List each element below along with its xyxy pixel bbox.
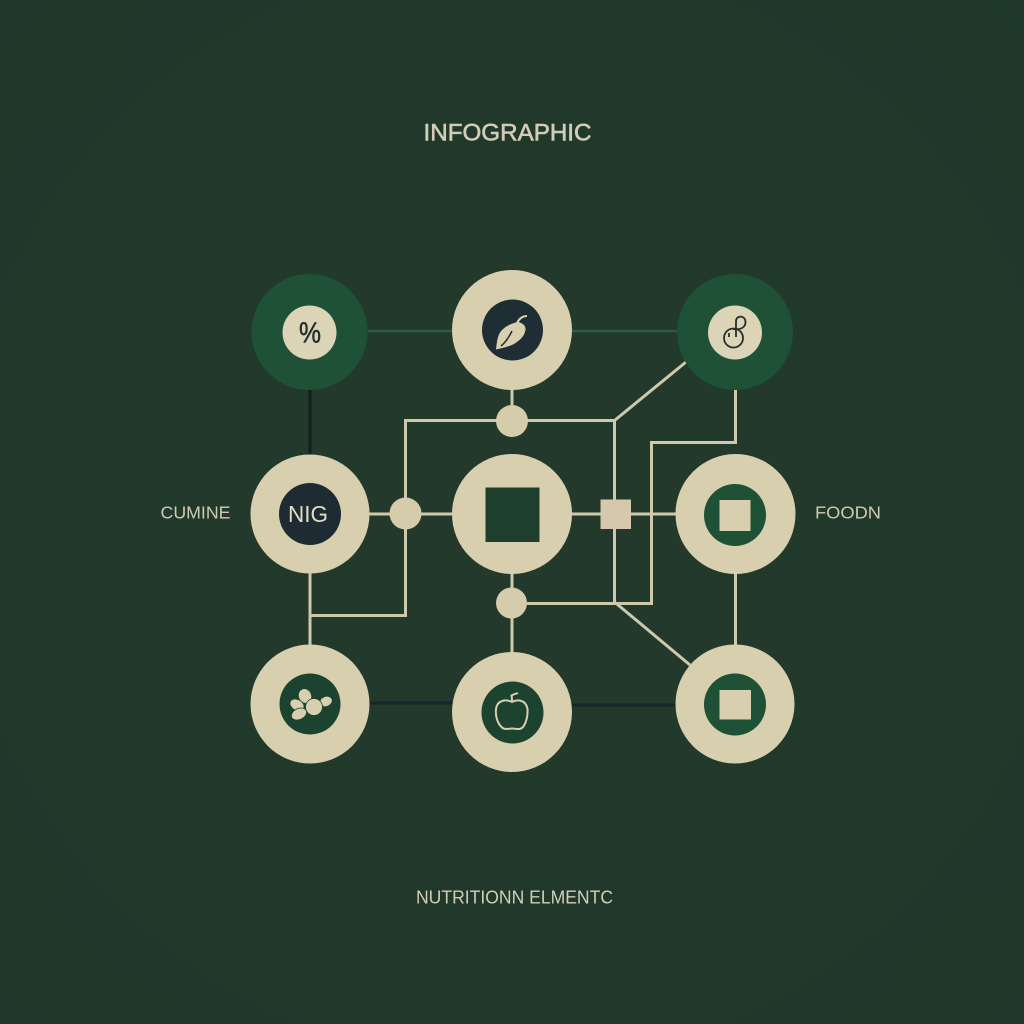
icon: apple: [496, 693, 528, 729]
node: top right symbol: [677, 274, 793, 390]
connector network: [310, 331, 736, 705]
icon: nuts: [288, 686, 334, 722]
node: top left percent: [252, 274, 368, 390]
node: top center leaf: [452, 270, 572, 390]
icon: leaf: [496, 316, 527, 350]
node text: NIG: [288, 501, 328, 527]
bottom caption: NUTRITIONN ELMENTC: [416, 888, 613, 908]
junction: top circle: [496, 405, 528, 437]
junction: square: [600, 500, 631, 529]
title: INFOGRAPHIC: [424, 120, 592, 146]
icon: percent sign: %: [299, 318, 321, 350]
node: bottom right square: [676, 644, 794, 764]
node: bottom center apple: [452, 652, 572, 772]
node: middle right square: [676, 454, 796, 574]
junction: bottom circle: [496, 588, 527, 618]
junction: left circle: [390, 498, 422, 530]
node: bottom left nuts: [250, 644, 370, 764]
left label: CUMINE: [160, 502, 230, 522]
icon: looped symbol: [724, 317, 746, 348]
right label: FOODN: [815, 502, 881, 522]
node: center square: [452, 454, 572, 574]
node: middle left NIG: [250, 454, 370, 574]
